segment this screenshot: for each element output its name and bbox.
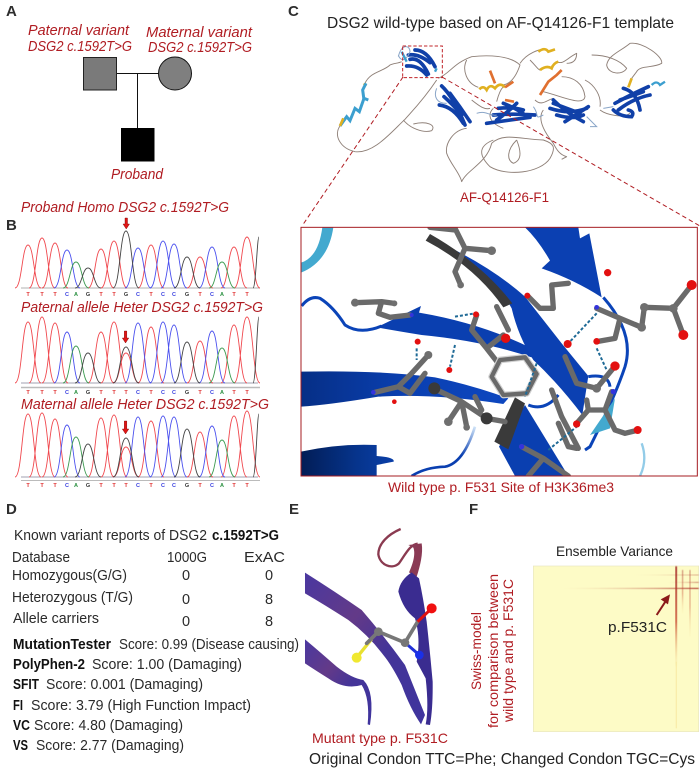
base calls: C bbox=[65, 292, 69, 298]
long lower strand bbox=[301, 371, 508, 407]
paternal variant label bbox=[28, 22, 132, 55]
base calls: A bbox=[220, 483, 224, 489]
variance hot lines bbox=[560, 566, 699, 728]
prediction scores: Score: 4.80 (Damaging) bbox=[34, 718, 183, 734]
table heading: c.1592T>G bbox=[212, 528, 279, 544]
base calls: C bbox=[136, 292, 140, 298]
prediction scores: PolyPhen-2 bbox=[13, 657, 85, 673]
base calls: T bbox=[198, 483, 202, 489]
fading coils bbox=[412, 427, 475, 476]
base calls bbox=[26, 292, 249, 298]
proband label: Proband bbox=[111, 166, 164, 183]
base calls: G bbox=[185, 483, 189, 489]
phenylalanine ring F531 bbox=[492, 357, 537, 395]
zoom dashed leader lines bbox=[302, 77, 700, 226]
base calls: T bbox=[53, 292, 57, 298]
icon: father square bbox=[84, 58, 116, 90]
base calls: T bbox=[26, 483, 30, 489]
base calls: C bbox=[172, 390, 176, 396]
label D: D bbox=[6, 501, 17, 518]
base calls: C bbox=[65, 483, 69, 489]
close-up structure panel bbox=[301, 227, 697, 476]
panel E: mutant structure bbox=[289, 501, 448, 746]
base calls: T bbox=[198, 390, 202, 396]
base calls bbox=[26, 390, 249, 396]
base calls bbox=[26, 483, 249, 489]
base calls: G bbox=[185, 292, 189, 298]
variant frequency table: Database bbox=[12, 550, 70, 566]
arrow: maternal mutation site bbox=[122, 421, 129, 434]
close-up frame bbox=[301, 227, 697, 476]
beta sheet domains bbox=[407, 50, 650, 125]
variant frequency table bbox=[12, 550, 285, 630]
arrow: paternal mutation site bbox=[122, 331, 129, 343]
base calls: T bbox=[149, 292, 153, 298]
thin blue coil left bbox=[302, 297, 627, 450]
lower ribbon bbox=[305, 639, 371, 725]
main diagonal strand bbox=[452, 248, 588, 415]
prediction scores: VC bbox=[13, 718, 30, 734]
yellow and blue helices bbox=[340, 98, 368, 126]
rotated red caption bbox=[468, 574, 516, 728]
base calls: T bbox=[232, 483, 236, 489]
base calls: T bbox=[149, 390, 153, 396]
rotated red caption: for comparison between bbox=[485, 574, 501, 728]
mutant caption: Mutant type p. F531C bbox=[312, 730, 448, 746]
prediction scores bbox=[13, 637, 299, 754]
bottom-left dark arrow bbox=[301, 445, 394, 476]
base calls: T bbox=[112, 390, 116, 396]
base calls: C bbox=[172, 483, 176, 489]
variant frequency table: Homozygous(G/G) bbox=[12, 568, 127, 584]
panel B: sequencing chromatograms bbox=[6, 199, 269, 489]
base calls: T bbox=[245, 292, 249, 298]
base calls: G bbox=[124, 292, 128, 298]
base calls: C bbox=[172, 292, 176, 298]
base calls: T bbox=[26, 292, 30, 298]
prediction scores: Score: 0.99 (Disease causing) bbox=[119, 637, 299, 653]
base calls: G bbox=[86, 390, 90, 396]
heatmap bbox=[533, 566, 699, 732]
base calls: G bbox=[86, 292, 90, 298]
chromatogram: proband bbox=[15, 231, 260, 298]
base calls: A bbox=[74, 483, 78, 489]
heatmap title: Ensemble Variance bbox=[556, 543, 673, 559]
base calls: A bbox=[220, 292, 224, 298]
dark edge of lower strand bbox=[494, 397, 525, 449]
paternal trace heading: Paternal allele Heter DSG2 c.1592T>G bbox=[21, 299, 263, 316]
prediction scores: Score: 3.79 (High Function Impact) bbox=[31, 698, 251, 714]
label B: B bbox=[6, 217, 17, 234]
variant frequency table: 1000G bbox=[167, 550, 207, 566]
AF-Q14126-F1 label: AF-Q14126-F1 bbox=[460, 189, 549, 205]
prediction scores: SFIT bbox=[13, 677, 39, 693]
base calls: T bbox=[40, 292, 44, 298]
base calls: A bbox=[74, 292, 78, 298]
base calls: G bbox=[185, 390, 189, 396]
disordered coil loops bbox=[337, 62, 437, 152]
maroon loop tail bbox=[408, 543, 422, 577]
base calls: C bbox=[210, 483, 214, 489]
panel A: pedigree bbox=[6, 3, 253, 183]
base calls: C bbox=[161, 483, 165, 489]
codon footnote: Original Condon TTC=Phe; Changed Condon TGC=Cys bbox=[309, 751, 695, 768]
variant frequency table: 0 bbox=[182, 592, 190, 608]
arrow: p.F531C bbox=[657, 594, 670, 615]
maternal variant label bbox=[146, 24, 253, 56]
main ribbon bbox=[305, 573, 425, 724]
light coil detail around domains bbox=[398, 47, 613, 127]
dark edge of main strand bbox=[426, 234, 512, 307]
variant frequency table: Heterozygous (T/G) bbox=[12, 590, 133, 606]
base calls: C bbox=[161, 390, 165, 396]
base calls: T bbox=[112, 292, 116, 298]
dashed selection box bbox=[403, 46, 442, 78]
AlphaFold overview structure bbox=[337, 43, 665, 182]
base calls: T bbox=[124, 390, 128, 396]
prediction scores: Score: 0.001 (Damaging) bbox=[46, 677, 203, 693]
light blue turn bbox=[590, 398, 615, 435]
variant frequency table: 8 bbox=[265, 592, 273, 608]
chromatogram: paternal bbox=[15, 317, 260, 396]
base calls: C bbox=[161, 292, 165, 298]
arrow: proband mutation site bbox=[123, 218, 130, 229]
base calls: G bbox=[86, 483, 90, 489]
stick side chains bbox=[355, 227, 692, 476]
base calls: T bbox=[40, 390, 44, 396]
p.F531C label: p.F531C bbox=[608, 620, 667, 636]
base calls: T bbox=[99, 292, 103, 298]
variant frequency table: 0 bbox=[265, 568, 273, 584]
rotated red caption: Swiss-model bbox=[468, 612, 484, 690]
pedigree connector lines bbox=[116, 74, 159, 128]
base calls: C bbox=[65, 390, 69, 396]
rear strand bbox=[398, 572, 433, 725]
base calls: T bbox=[99, 483, 103, 489]
base calls: T bbox=[232, 292, 236, 298]
light blue ribbon top left bbox=[301, 227, 333, 273]
variant frequency table: ExAC bbox=[244, 550, 285, 566]
mutant structure ribbons and cysteine bbox=[305, 529, 437, 725]
base calls: T bbox=[245, 483, 249, 489]
cysteine side chain bbox=[352, 603, 437, 663]
rotated red caption: wild type and p. F531C bbox=[500, 579, 516, 723]
prediction scores: VS bbox=[13, 738, 28, 754]
label C: C bbox=[288, 3, 299, 20]
maroon loop bbox=[378, 529, 418, 566]
base calls: C bbox=[210, 292, 214, 298]
variant frequency table: Allele carriers bbox=[13, 611, 99, 627]
prediction scores: Score: 1.00 (Damaging) bbox=[92, 657, 242, 673]
base calls: C bbox=[136, 390, 140, 396]
variant frequency table: 0 bbox=[182, 568, 190, 584]
maternal variant label: Maternal variant bbox=[146, 24, 253, 41]
base calls: T bbox=[40, 483, 44, 489]
lower diagonal strand bbox=[499, 405, 568, 476]
maternal variant label: DSG2 c.1592T>G bbox=[148, 39, 252, 56]
proband trace heading: Proband Homo DSG2 c.1592T>G bbox=[21, 199, 229, 216]
base calls: C bbox=[136, 483, 140, 489]
close-up caption: Wild type p. F531 Site of H3K36me3 bbox=[388, 479, 614, 495]
prediction scores: Score: 2.77 (Damaging) bbox=[36, 738, 184, 754]
base calls: A bbox=[220, 390, 224, 396]
panel C: wild-type structure bbox=[288, 3, 700, 495]
base calls: T bbox=[232, 390, 236, 396]
oxygen and nitrogen atoms bbox=[351, 246, 697, 449]
label F: F bbox=[469, 501, 478, 518]
base calls: T bbox=[245, 390, 249, 396]
table heading: Known variant reports of DSG2 bbox=[14, 528, 207, 544]
variant frequency table: 8 bbox=[265, 614, 273, 630]
label A: A bbox=[6, 3, 17, 20]
panel F: ensemble variance heatmap bbox=[468, 501, 699, 732]
base calls: T bbox=[198, 292, 202, 298]
chromatogram: maternal bbox=[15, 411, 260, 489]
phenylalanine ring bonds bbox=[492, 357, 537, 395]
base calls: T bbox=[124, 483, 128, 489]
paternal variant label: Paternal variant bbox=[28, 22, 130, 39]
icon: mother circle bbox=[158, 57, 192, 90]
base calls: T bbox=[99, 390, 103, 396]
base calls: A bbox=[74, 390, 78, 396]
base calls: T bbox=[53, 483, 57, 489]
base calls: T bbox=[26, 390, 30, 396]
prediction scores: MutationTester bbox=[13, 637, 111, 653]
prediction scores: FI bbox=[13, 698, 23, 714]
icon: proband square bbox=[121, 128, 154, 162]
maternal trace heading: Maternal allele Heter DSG2 c.1592T>G bbox=[21, 396, 269, 413]
paternal variant label: DSG2 c.1592T>G bbox=[28, 38, 132, 55]
base calls: T bbox=[149, 483, 153, 489]
label E: E bbox=[289, 501, 299, 518]
base calls: T bbox=[112, 483, 116, 489]
base calls: T bbox=[53, 390, 57, 396]
hydrogen bonds dashed bbox=[417, 313, 607, 450]
top arrowhead strand bbox=[525, 227, 602, 297]
panel D: variant table and scores bbox=[6, 501, 299, 754]
variant frequency table: 0 bbox=[182, 614, 190, 630]
arrow strand upper bbox=[377, 306, 532, 357]
base calls: C bbox=[210, 390, 214, 396]
panel C title: DSG2 wild-type based on AF-Q14126-F1 template bbox=[327, 15, 674, 32]
